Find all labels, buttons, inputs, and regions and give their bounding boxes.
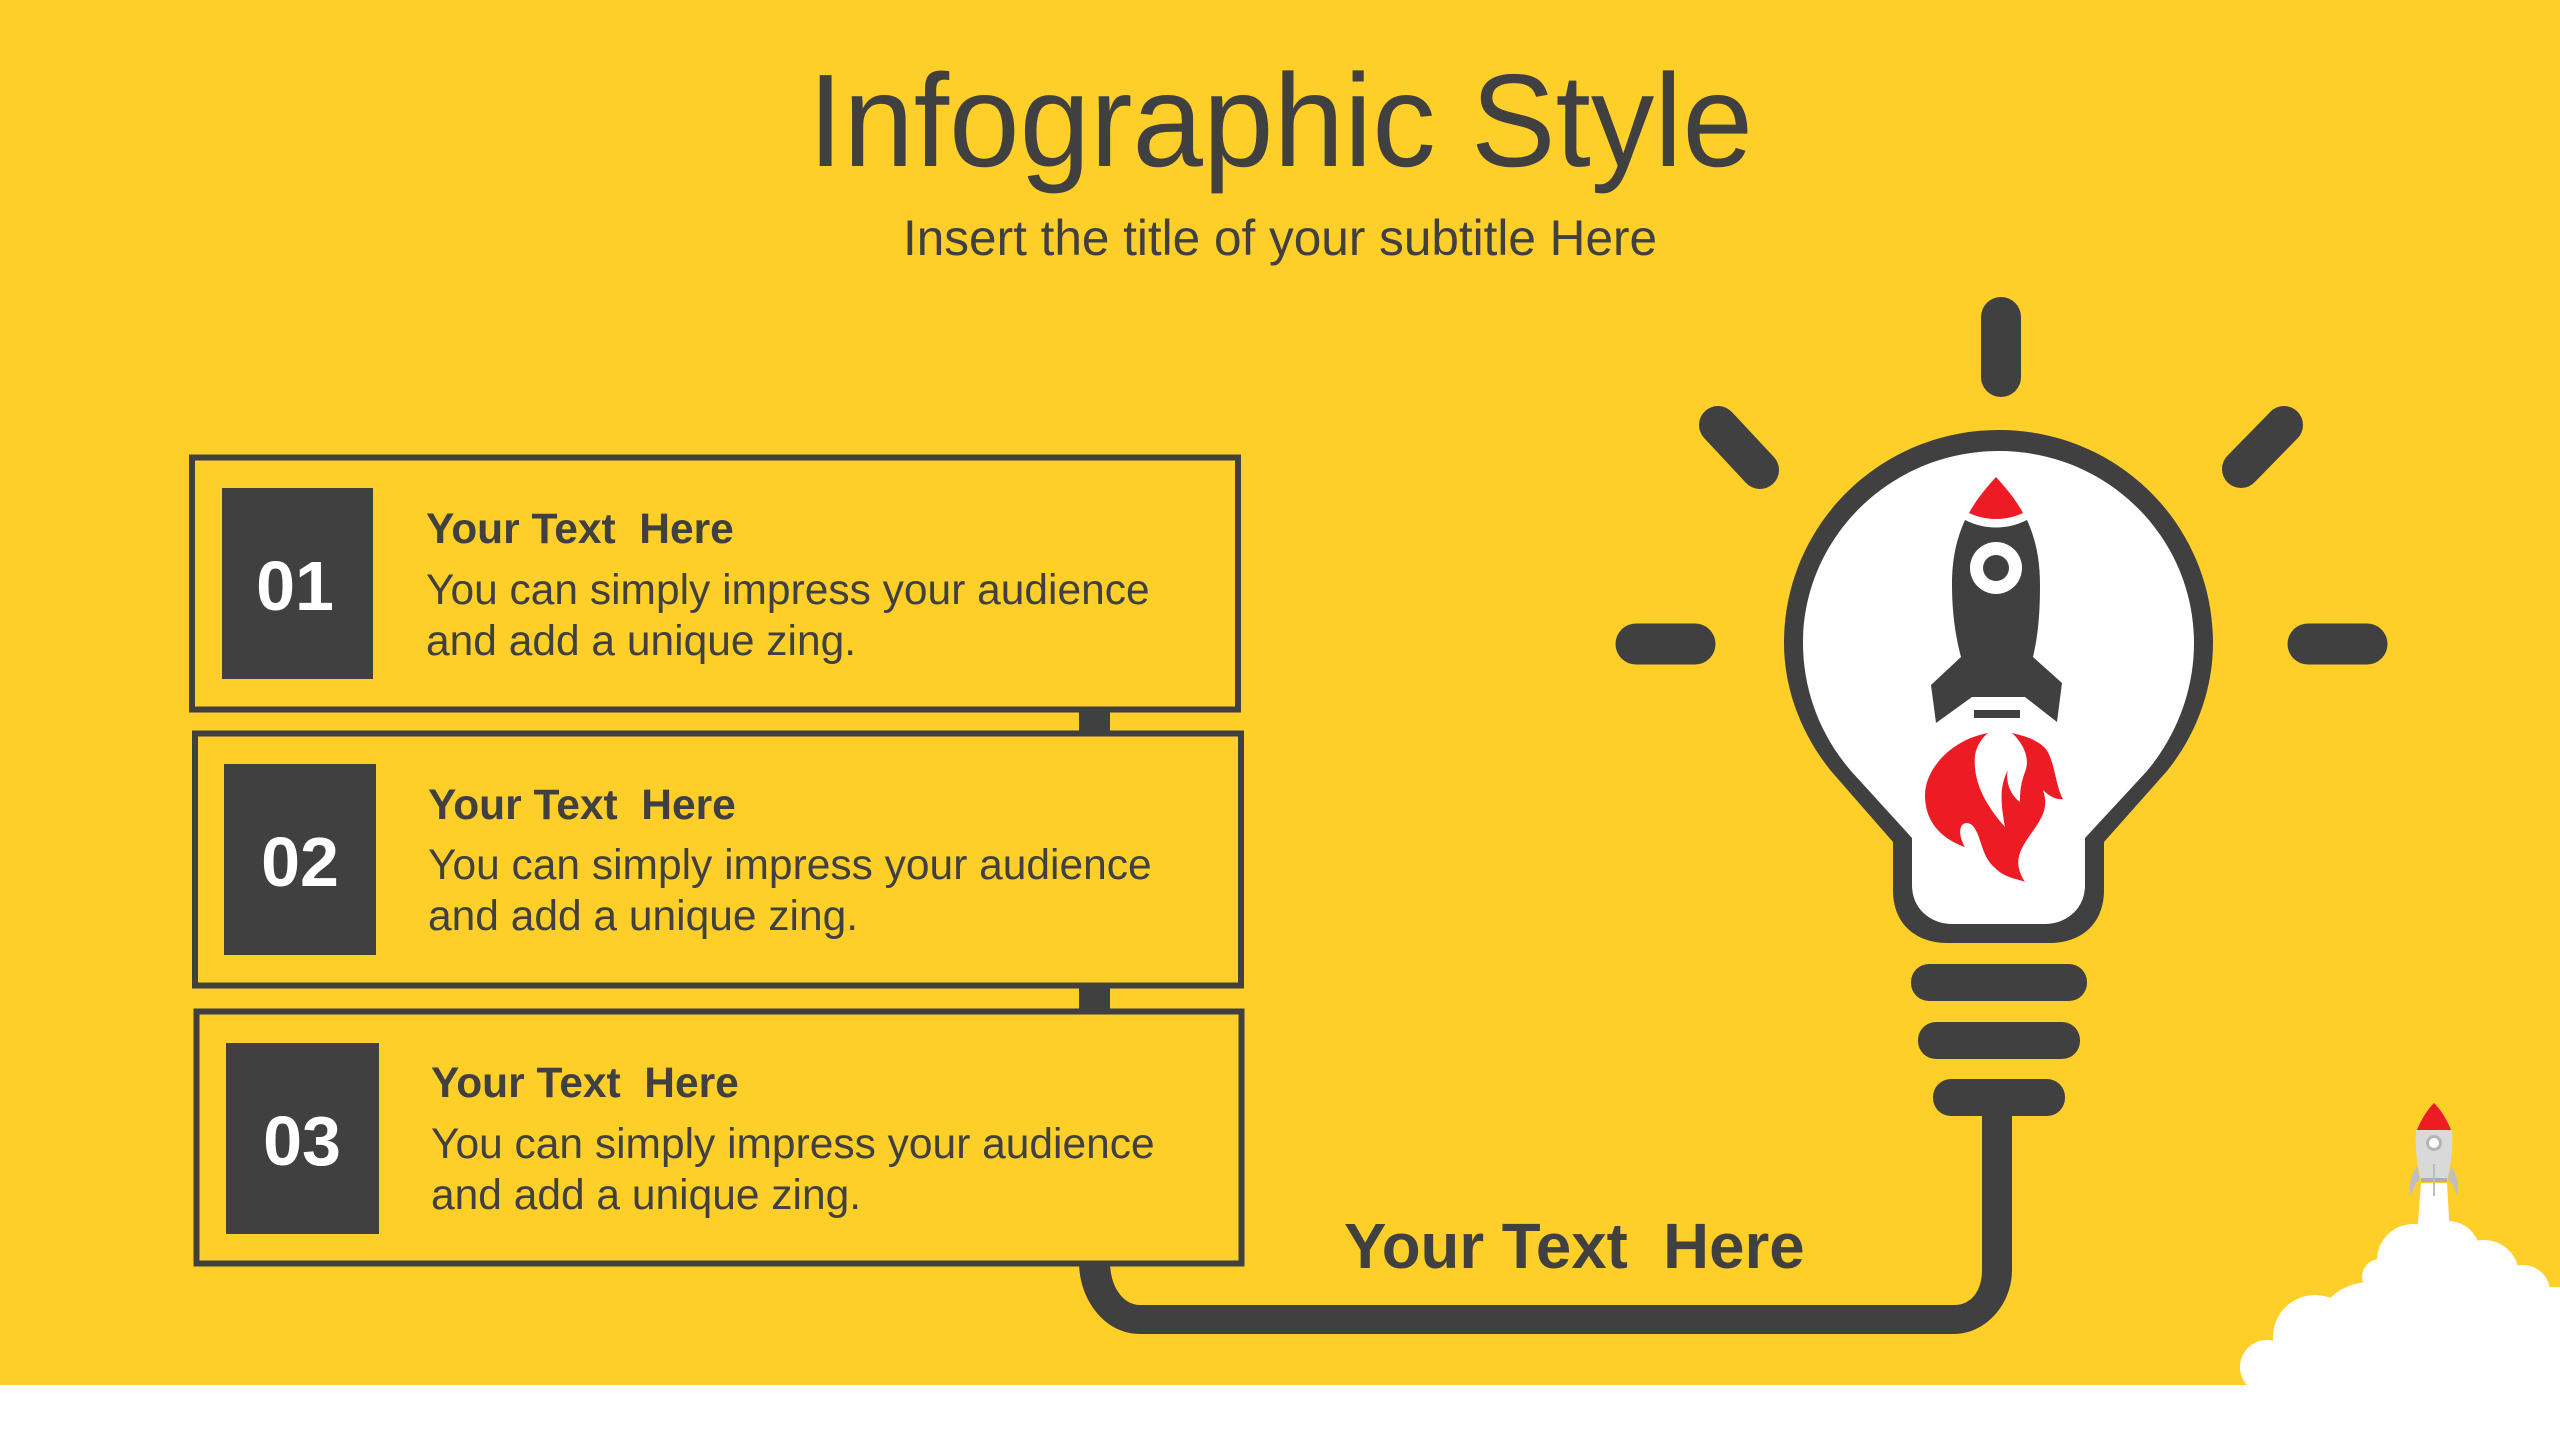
number badge 02: [224, 764, 376, 955]
icon: rocket in bulb: [1925, 477, 2063, 882]
wire from panels to bulb: [1079, 1110, 2012, 1334]
number badge 03: [226, 1043, 379, 1234]
body text 03: and add a unique zing.: [431, 1172, 861, 1219]
number badge 01: [222, 488, 373, 679]
body text 01: You can simply impress your audience: [426, 567, 1150, 614]
number 03: 03: [263, 1102, 341, 1180]
panel frame 03: [196, 1012, 1242, 1264]
panel frame 02: [195, 734, 1241, 986]
body text 01: and add a unique zing.: [426, 618, 856, 665]
icon: smoke cloud: [2240, 1183, 2560, 1398]
body text 02: and add a unique zing.: [428, 893, 858, 940]
panel: item 03: [196, 1012, 1242, 1264]
panel: item 01: [192, 458, 1238, 710]
body text 03: You can simply impress your audience: [431, 1121, 1155, 1168]
heading 01: Your Text Here: [426, 506, 734, 553]
panel frame 01: [192, 458, 1238, 710]
heading 02: Your Text Here: [428, 782, 736, 829]
body text 02: You can simply impress your audience: [428, 842, 1152, 889]
subtitle: Insert the title of your subtitle Here: [903, 209, 1657, 266]
number 02: 02: [261, 823, 339, 901]
heading 03: Your Text Here: [431, 1060, 739, 1107]
bottom label: Your Text Here: [1344, 1211, 1805, 1282]
title: Infographic Style: [808, 47, 1753, 194]
icon: light rays: [1636, 317, 2367, 644]
connector between panels 02 and 03: [1079, 988, 1110, 1009]
number 01: 01: [256, 547, 334, 625]
icon: light bulb: [1784, 430, 2213, 1116]
panel: item 02: [195, 734, 1241, 986]
icon: small rocket: [2410, 1103, 2458, 1196]
connector between panels 01 and 02: [1079, 712, 1110, 731]
